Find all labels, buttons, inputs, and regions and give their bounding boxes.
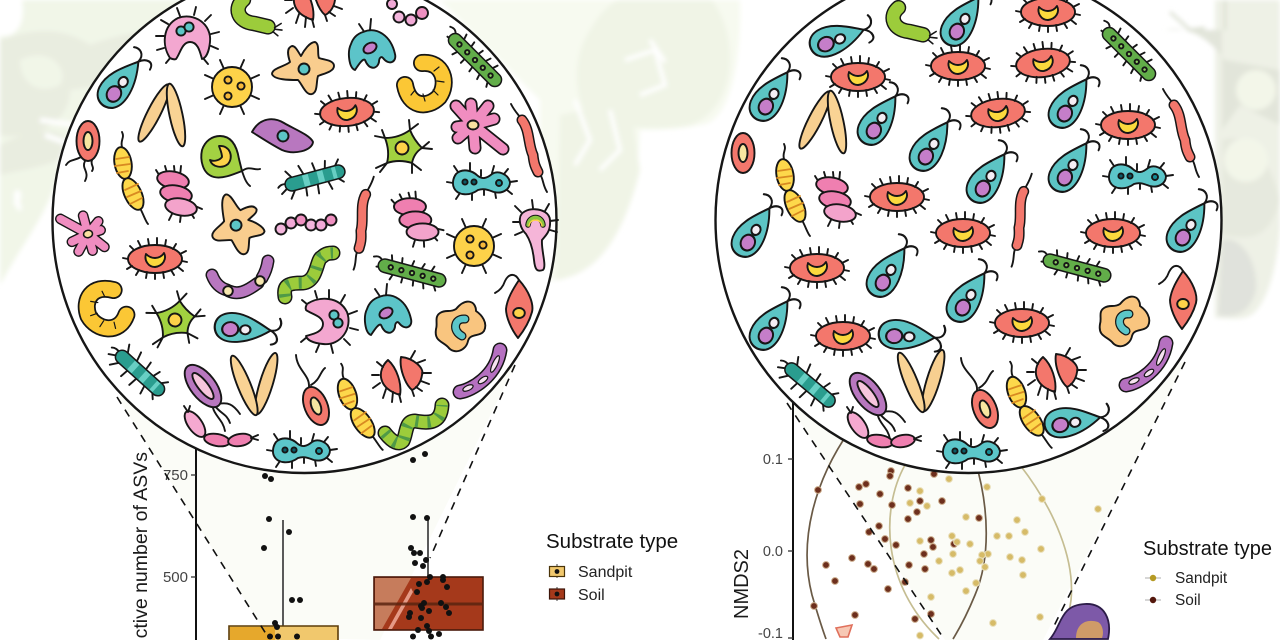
data points: soil [811, 468, 982, 622]
icon: red ring cell [732, 133, 754, 173]
icon: teal flagellate [936, 0, 996, 54]
icon: red ciliate [313, 88, 381, 135]
y-axis title: NMDS2 [731, 549, 753, 619]
icon: teal dumbbell [937, 432, 1007, 469]
boxplot: soil [374, 519, 483, 630]
magnifier circle [716, 0, 1222, 473]
legend title: Substrate type [546, 530, 678, 553]
icon: teal amoeba [365, 284, 411, 335]
zoom dashed lines: ordination [787, 362, 1185, 639]
icon: pink star cell [60, 212, 105, 255]
icon: red ciliate [865, 176, 929, 217]
icon: red ciliate [926, 45, 990, 86]
data points: sandpit [907, 476, 1101, 639]
icon: red leaf cell [1159, 266, 1196, 329]
legend: substrate type (ordination) [1143, 538, 1272, 609]
icon: red ciliate [785, 247, 849, 288]
icon: green bacillus [438, 23, 503, 88]
icon: teal flagellate [962, 135, 1022, 211]
icon: red ring cell [66, 121, 100, 181]
background: pale forest right [1090, 0, 1280, 319]
icon: teal flagellate [942, 254, 1002, 330]
icon: red ciliate [123, 238, 187, 279]
icon: flagella of red ring cell [296, 355, 325, 387]
icon: pink stacked cell [391, 188, 446, 251]
data points: sandpit [261, 473, 303, 640]
icon: diatom [226, 346, 292, 421]
icon: yellow paired cell [331, 359, 383, 456]
legend: substrate type (boxplot) [546, 530, 678, 604]
y tick 500: 500 [163, 569, 188, 586]
icon: orange amoeba [206, 189, 268, 259]
icon: red ciliate [990, 302, 1054, 343]
icon: teal flagellate [1041, 394, 1115, 448]
icon: teal flagellate [853, 77, 913, 153]
icon: teal amoeba [349, 19, 395, 70]
icon: pink bead chain [276, 214, 336, 234]
icon: teal flagellate [92, 42, 156, 117]
icon: pink stacked cell [156, 166, 202, 222]
icon: green bacillus [369, 251, 442, 292]
icon: red ciliate [1081, 212, 1145, 253]
icon: red ciliate [826, 56, 890, 97]
icon: yellow paired cell [112, 132, 148, 224]
icon: teal caterpillar [771, 348, 841, 415]
icon: diatom [795, 89, 850, 155]
zoom cone shading: ordination [787, 362, 1185, 640]
icon: purple long cell [460, 350, 501, 393]
icon: pink crescent [301, 290, 358, 353]
data points: soil [406, 451, 452, 640]
panel: low diversity microbial community (right magnifier) [716, 0, 1222, 473]
icon: purple cell [252, 119, 313, 152]
icon: pink chain [181, 406, 258, 448]
icon: purple bead arc [212, 261, 268, 296]
icon: green C [893, 8, 937, 44]
icon: purple oval cell [843, 367, 905, 439]
icon: lime pear cell [201, 136, 260, 186]
icon: teal dumbbell [267, 431, 337, 468]
y tick 0.1: 0.1 [763, 452, 783, 468]
icon: teal dumbbell [1103, 157, 1173, 194]
legend key: sandpit: Sandpit [578, 564, 633, 581]
icon: red ciliate [811, 315, 875, 356]
magnifier circle [52, 0, 556, 473]
icon: red ciliate [1016, 0, 1080, 32]
icon: orange flower cell [436, 302, 485, 351]
icon: teal flagellate [745, 282, 805, 358]
y tick 0.1 [763, 452, 793, 468]
icon: teal caterpillar [101, 336, 171, 403]
icon: teal flagellate [878, 316, 947, 356]
icon: purple long cell [1126, 343, 1167, 386]
icon: flagella of red ring cell [961, 358, 993, 390]
legend key: sandpit: Sandpit [1175, 570, 1228, 587]
icon: orange amoeba [272, 42, 334, 94]
icon: pink crescent [156, 7, 219, 64]
ellipse: soil [807, 430, 986, 639]
icon: red ring cell [967, 386, 1003, 432]
icon: red halves [285, 0, 344, 27]
icon: red ring cell [298, 383, 334, 429]
y-axis title: ctive number of ASVs [130, 452, 152, 638]
icon: green star cell [144, 287, 209, 349]
icon: pink star cell [456, 104, 503, 149]
icon: red worm [996, 174, 1047, 267]
icon: pink club cell [513, 200, 558, 271]
icon: red worm [1163, 89, 1199, 177]
icon: red halves [372, 351, 431, 402]
icon: yellow paired cell [774, 144, 810, 236]
y-axis line [792, 402, 794, 640]
chart: effective number of ASVs boxplot [130, 440, 483, 640]
icon: yellow paired cell [1000, 357, 1052, 454]
y tick 750: 750 [163, 467, 188, 484]
icon: diatom [893, 343, 959, 418]
legend title: Substrate type [1143, 538, 1272, 560]
icon: pink cup [836, 625, 852, 637]
icon: teal flagellate [745, 53, 805, 129]
icon: red ciliate [964, 88, 1032, 137]
icon: teal flagellate [862, 229, 922, 305]
legend key: soil: Soil [1175, 592, 1201, 609]
icon: orange flower cell [1100, 297, 1149, 346]
icon: green bacillus [1034, 246, 1107, 287]
icon: yellow round cell [205, 60, 259, 114]
icon: green bacillus [1092, 17, 1157, 82]
icon: teal caterpillar [274, 156, 345, 203]
zoom dashed lines: richness [117, 365, 515, 637]
icon: diatom [134, 82, 189, 148]
icon: red leaf cell [495, 275, 532, 338]
background: pale forest centre [440, 0, 740, 280]
icon: yellow C [405, 63, 444, 104]
icon: red ciliate [931, 212, 995, 253]
icon: teal flagellate [805, 6, 880, 68]
icon: red worm [511, 104, 547, 192]
legend key: soil: Soil [578, 587, 605, 604]
icon: yellow round cell [447, 219, 501, 273]
icon: teal flagellate [1044, 60, 1104, 136]
zoom cone shading: richness [117, 365, 515, 640]
icon: purple organism with tan body [1050, 604, 1109, 639]
icon: green worm [285, 253, 333, 297]
icon: purple oval cell [178, 359, 240, 431]
icon: teal flagellate [1044, 124, 1104, 200]
boxplot: sandpit [229, 520, 338, 640]
icon: green worm [385, 405, 442, 443]
icon: red worm [338, 177, 389, 270]
icon: red ciliate [1096, 104, 1160, 145]
icon: teal flagellate [905, 103, 965, 179]
icon: yellow C [80, 282, 134, 335]
icon: pink stacked cell [815, 172, 861, 228]
ellipse: sandpit [890, 465, 1072, 639]
chart: NMDS ordination [731, 402, 1101, 640]
panel: diverse microbial community (left magnifier) [52, 0, 558, 473]
icon: pink chain [844, 407, 921, 449]
icon: teal flagellate [1162, 184, 1222, 260]
icon: teal dumbbell [447, 163, 517, 200]
background: pale forest left [0, 0, 300, 285]
y-axis line [195, 440, 197, 640]
icon: green star cell [375, 120, 432, 173]
icon: teal flagellate [727, 189, 787, 265]
y tick 0.0: 0.0 [763, 544, 783, 560]
icon: teal flagellate [214, 309, 283, 349]
y tick 0.0 [763, 544, 793, 560]
icon: green C [238, 0, 282, 36]
icon: red halves [1027, 348, 1086, 399]
icon: red ciliate [1009, 38, 1077, 87]
icon: pink beads [387, 0, 428, 26]
